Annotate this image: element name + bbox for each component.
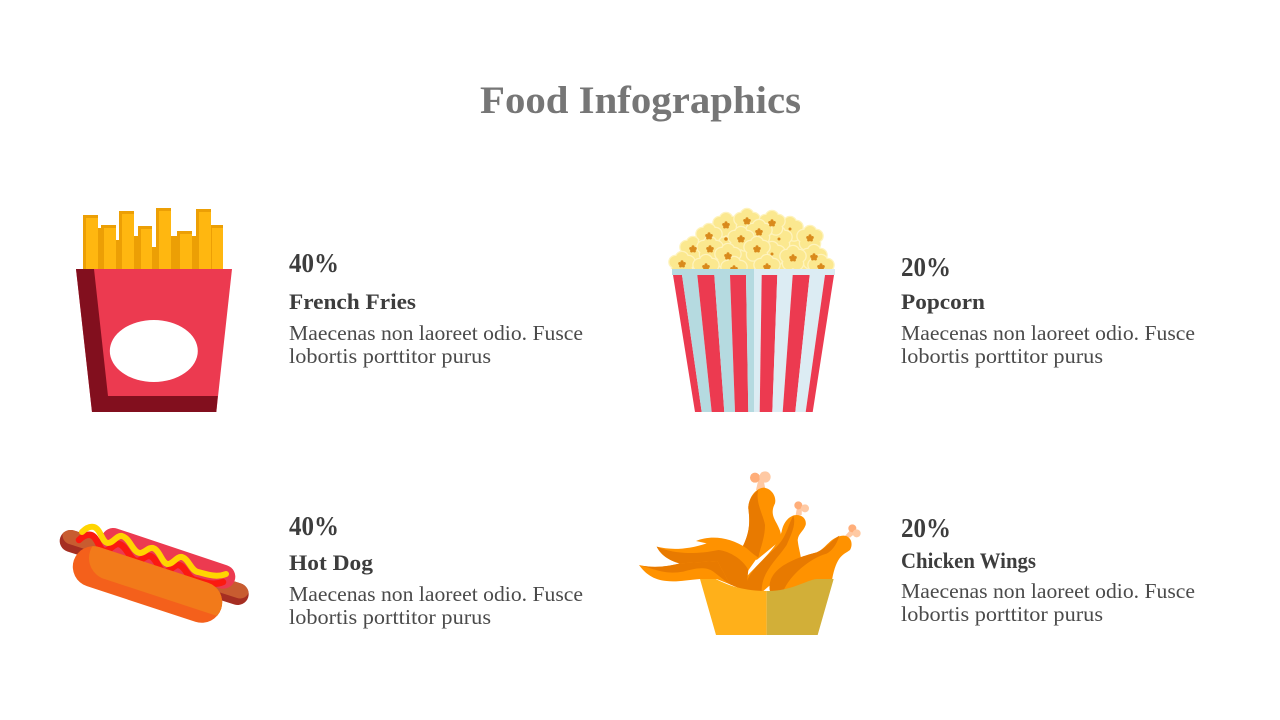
description: [289, 321, 583, 368]
description: Maecenas non laoreet odio. Fusce: [289, 321, 583, 345]
icon: hot dog: [71, 527, 240, 602]
item heading: Hot Dog: [289, 550, 374, 575]
percentage: 20%: [901, 252, 951, 282]
panel: hot dog: [71, 511, 583, 629]
description: lobortis porttitor purus: [289, 605, 491, 629]
description: lobortis porttitor purus: [901, 602, 1103, 626]
icon: chicken wings box: [639, 471, 861, 635]
item heading: French Fries: [289, 289, 416, 314]
description: Maecenas non laoreet odio. Fusce: [901, 321, 1195, 345]
percentage: 20%: [901, 513, 951, 543]
description: lobortis porttitor purus: [901, 344, 1103, 368]
percentage: 40%: [289, 248, 339, 278]
description: [901, 321, 1195, 368]
item heading: Popcorn: [901, 289, 985, 314]
title: Food Infographics: [480, 79, 801, 122]
description: lobortis porttitor purus: [289, 344, 491, 368]
icon: popcorn bucket: [668, 208, 835, 412]
icon: french fries box: [76, 208, 232, 412]
description: [289, 582, 583, 629]
panel: popcorn: [668, 208, 1195, 412]
panel: chicken wings: [639, 471, 1195, 635]
item heading: Chicken Wings: [901, 548, 1036, 573]
description: [901, 579, 1195, 626]
percentage: 40%: [289, 511, 339, 541]
description: Maecenas non laoreet odio. Fusce: [901, 579, 1195, 603]
description: Maecenas non laoreet odio. Fusce: [289, 582, 583, 606]
panel: french fries: [76, 208, 583, 412]
